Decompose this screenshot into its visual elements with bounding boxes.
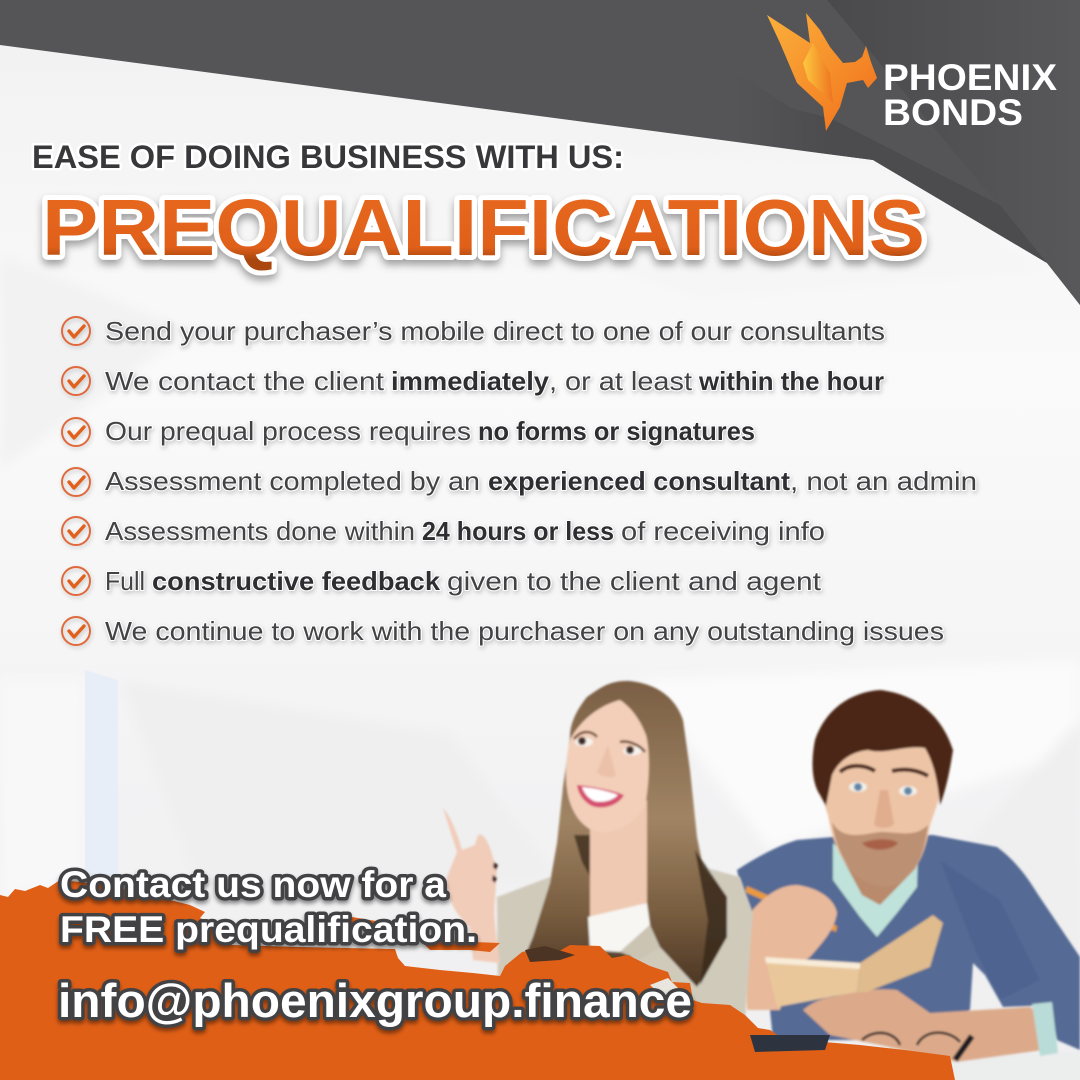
item 6: Full [105, 566, 145, 596]
neck [590, 800, 647, 918]
item 1: Send your purchaser’s mobile direct to one of our consultants [105, 316, 885, 346]
item 4: , not an admin [790, 466, 977, 496]
item 5: 24 hours or less [422, 516, 614, 546]
dark header shape [0, 0, 1080, 305]
item 4 [62, 466, 977, 496]
item 2: immediately [391, 366, 550, 396]
dark hair strands [695, 850, 727, 985]
glasses [862, 1033, 972, 1060]
call to action: contact line 2: FREE prequalification. [60, 909, 477, 950]
item 2: We contact the client [105, 366, 385, 396]
wordmark line 2: BONDS [883, 92, 1023, 133]
item 2 [62, 366, 884, 396]
photo: man with notebook [737, 690, 1080, 1080]
beard [832, 822, 928, 886]
neck [838, 850, 918, 905]
cardigan front [620, 925, 660, 960]
cuff [1032, 1002, 1058, 1056]
table [940, 1052, 1080, 1080]
photo: woman pointing up [443, 681, 753, 1020]
checklist [62, 316, 977, 646]
item 5 [62, 516, 825, 546]
title: prequalifications: PREQUALIFICATIONS [42, 183, 925, 272]
face [824, 735, 940, 886]
item 2: , or at least [549, 366, 693, 396]
item 3: no forms or signatures [478, 416, 755, 446]
sweater [737, 835, 1080, 1050]
item 3 [62, 416, 755, 446]
icon: phoenix bird [767, 13, 877, 131]
call to action: contact line 1: Contact us now for a [60, 864, 446, 905]
nails [492, 862, 498, 883]
face [566, 700, 649, 832]
item 6 [62, 566, 822, 596]
item 6: constructive feedback [152, 566, 441, 596]
cardigan [497, 867, 753, 1020]
item 4: Assessment completed by an [105, 466, 480, 496]
item 5: Assessments done within [105, 516, 415, 546]
call to action: email: info@phoenixgroup.finance [58, 974, 692, 1027]
item 4: experienced consultant [488, 466, 790, 496]
brush splatter [420, 940, 500, 952]
notebook [765, 915, 943, 1007]
orange brush banner [0, 880, 955, 1080]
hair silhouette [520, 681, 727, 987]
facial features [574, 732, 645, 808]
hair [813, 690, 953, 806]
undershirt [588, 903, 650, 952]
right arm and hand [803, 989, 1047, 1062]
left hand [745, 885, 837, 1010]
item 5: of receiving info [621, 516, 825, 546]
item 2: within the hour [698, 366, 884, 396]
shirt collar [833, 843, 918, 937]
hand [443, 808, 500, 963]
wordmark: PHOENIX [883, 57, 1057, 98]
eyes and brows [840, 766, 928, 850]
title: prequalifications: PREQUALIFICATIONS [42, 183, 925, 272]
heading: ease of doing business: EASE OF DOING BUSINESS WITH US: [32, 139, 624, 175]
logo: Phoenix Bonds [767, 13, 1057, 131]
item 7: We continue to work with the purchaser on any outstanding issues [105, 616, 944, 646]
item 6: given to the client and agent [447, 566, 822, 596]
item 3: Our prequal process requires [105, 416, 471, 446]
pencil [745, 886, 837, 932]
